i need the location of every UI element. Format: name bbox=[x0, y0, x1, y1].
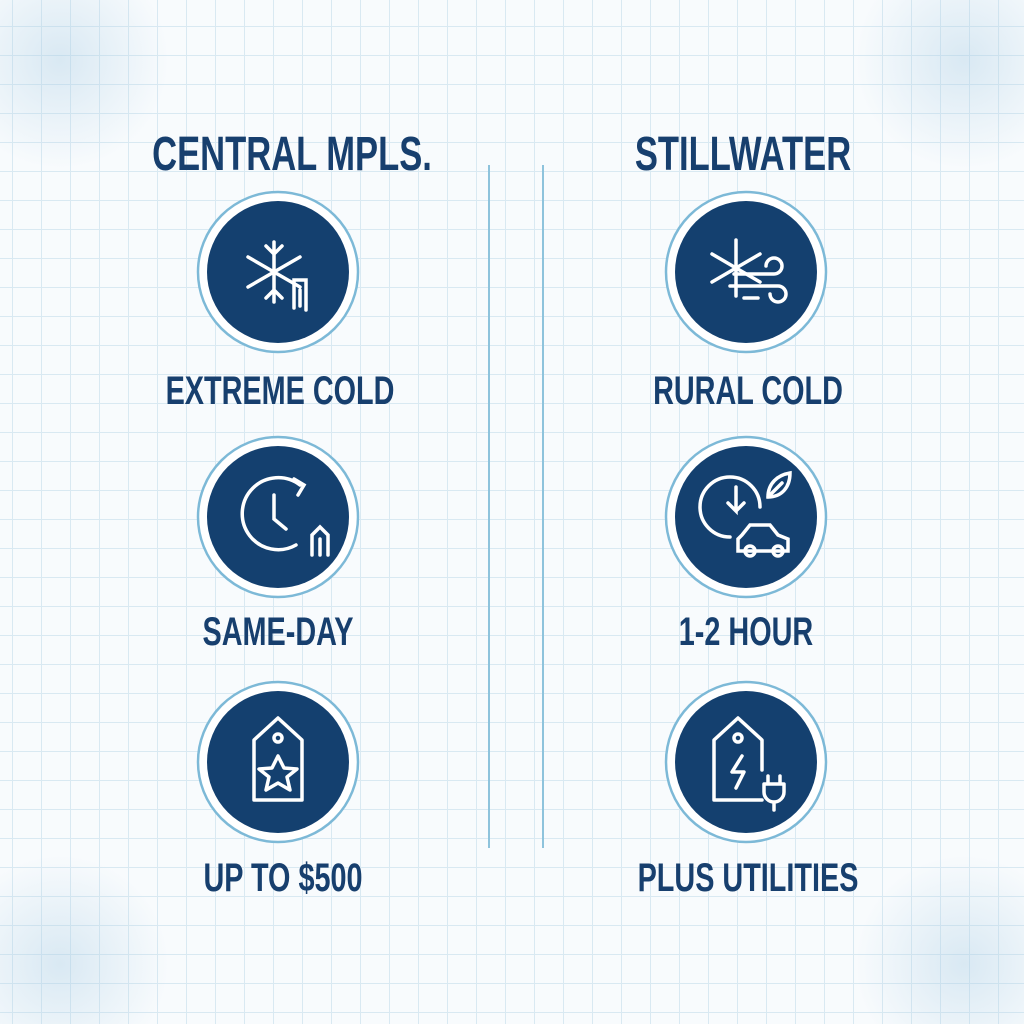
icon: tag bolt plug bbox=[664, 680, 828, 844]
label: 1-2 hour: 1-2 HOUR bbox=[679, 610, 813, 654]
label: rural cold: RURAL COLD bbox=[653, 369, 843, 413]
label: same-day: SAME-DAY bbox=[203, 610, 353, 654]
title: stillwater: STILLWATER bbox=[635, 128, 851, 181]
icon: tag star bbox=[196, 680, 360, 844]
label: extreme cold: EXTREME COLD bbox=[166, 369, 394, 413]
label: up to $500: UP TO $500 bbox=[203, 856, 363, 900]
icon: snowflake icicle bbox=[196, 190, 360, 354]
title: central mpls: CENTRAL MPLS. bbox=[152, 128, 432, 181]
icon: clock car leaf bbox=[664, 436, 828, 598]
icon: clock arrow bbox=[196, 436, 360, 598]
label: plus utilities: PLUS UTILITIES bbox=[638, 856, 858, 900]
icon: snowflake wind bbox=[664, 190, 828, 354]
